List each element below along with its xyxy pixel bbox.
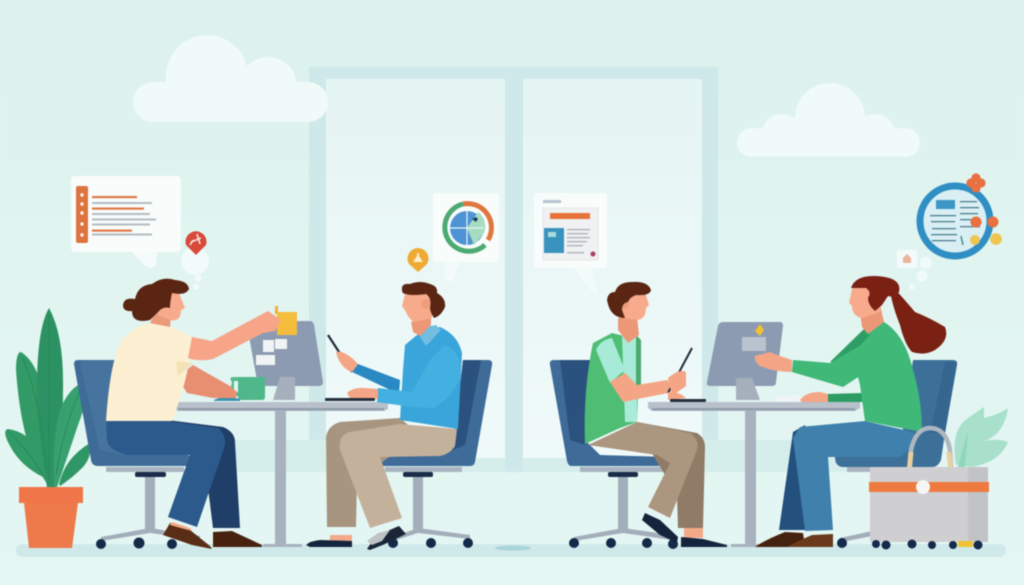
cloud right [737, 83, 920, 157]
back leg [326, 418, 420, 527]
orange clover markers [966, 173, 998, 228]
chair 1 [74, 360, 200, 549]
neck and head [150, 309, 171, 327]
person 2: chair [378, 360, 492, 548]
bag wheels [872, 540, 982, 550]
ponytail [890, 286, 946, 354]
cloud left [133, 35, 328, 122]
monitor 2 [707, 322, 783, 400]
hand [755, 352, 792, 372]
lower arm [827, 393, 864, 402]
hands [336, 352, 378, 399]
bag badge [916, 480, 930, 494]
yellow clover markers [970, 233, 1002, 245]
round infographic badge [920, 173, 1002, 256]
raised arm [792, 340, 872, 387]
front leg [106, 421, 225, 527]
arm [610, 373, 676, 402]
back leg [167, 420, 240, 528]
orange stripe [869, 482, 989, 492]
tablet [670, 399, 706, 402]
torso vest [585, 333, 640, 444]
front leg [793, 421, 914, 531]
shoes [306, 526, 406, 550]
floor shadow [16, 544, 1006, 557]
person 2 [306, 282, 462, 550]
shoes [642, 513, 727, 547]
front leg [340, 424, 457, 528]
back leg [779, 425, 815, 530]
person 3 [585, 282, 727, 547]
torso [852, 322, 922, 432]
hair [402, 282, 445, 318]
desk 1 [173, 402, 388, 547]
plant right [954, 407, 1008, 467]
lower arm [177, 365, 237, 398]
neck and head [411, 315, 431, 336]
hair [123, 279, 189, 321]
shoes [163, 522, 262, 549]
speech bubble: donut chart [433, 193, 499, 283]
tablet [325, 398, 375, 401]
monitor 1 [247, 321, 323, 400]
neck and head [860, 305, 884, 334]
bag handle [908, 428, 952, 484]
shoes [755, 532, 833, 547]
window [309, 67, 718, 458]
desk 2 [648, 402, 860, 547]
hair [851, 276, 899, 311]
front arm [377, 345, 461, 408]
person 3: chair [550, 360, 678, 549]
keyboard [775, 395, 801, 402]
front leg [588, 422, 698, 518]
leaves [5, 308, 90, 487]
bag body [870, 467, 988, 542]
neck and head [618, 316, 639, 343]
raised arm [188, 311, 281, 360]
person 4 [755, 276, 946, 547]
yellow pin [408, 248, 428, 272]
small thought document [897, 250, 932, 290]
pot [19, 487, 83, 548]
hands [668, 371, 686, 400]
sticky note [275, 306, 297, 335]
stylus [668, 348, 692, 393]
person 4: chair [835, 360, 957, 548]
person 1 [106, 279, 281, 549]
floor band [235, 440, 925, 472]
plant left [5, 308, 90, 548]
yellow foot [958, 541, 973, 547]
speech bubble: document [534, 193, 607, 294]
stylus [328, 335, 352, 372]
speech bubble: checklist [71, 176, 181, 268]
back leg [637, 422, 705, 528]
torso [106, 323, 192, 421]
hair [607, 282, 651, 318]
back arm [352, 364, 400, 394]
thought dots with red pin [181, 231, 209, 290]
torso [400, 327, 462, 429]
rolling bag [869, 428, 989, 550]
mug [214, 377, 265, 401]
